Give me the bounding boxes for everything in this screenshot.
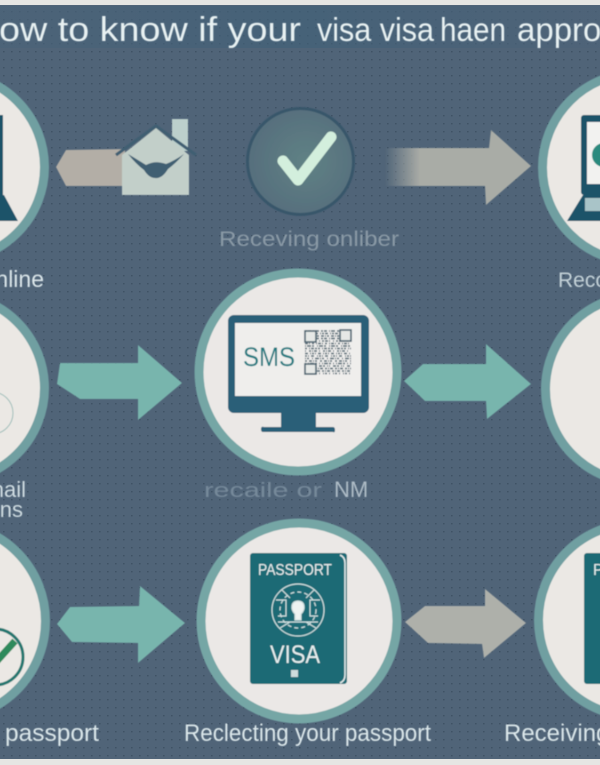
title: visa visa xyxy=(317,11,435,48)
arrow: teal arrow, middle left xyxy=(57,345,182,420)
arrow: grey arrow, bottom right xyxy=(405,589,526,658)
panel: middle right xyxy=(546,296,600,482)
title xyxy=(0,11,600,49)
icon: house envelope xyxy=(116,119,196,195)
label: receiving online: Receving onliber xyxy=(219,227,399,251)
panel: email, middle left xyxy=(0,294,44,482)
panel: passport, bottom right xyxy=(538,524,600,716)
arrow: beige arrow behind the house xyxy=(56,149,125,186)
icon: laptop, top right xyxy=(567,115,600,221)
label: passport, bottom left: passport xyxy=(5,720,99,747)
QR code xyxy=(305,330,351,374)
panel: online laptop, top left xyxy=(0,74,44,260)
icon: passport xyxy=(250,553,347,684)
icon: check stamp xyxy=(0,629,23,685)
passport emblem xyxy=(272,584,324,636)
label: collecting your passport: Reclecting your passport xyxy=(184,720,431,747)
label: email or SMS, centre xyxy=(204,477,368,502)
arrow: teal arrow, middle right xyxy=(404,344,531,419)
panel: passport, bottom left xyxy=(0,524,46,718)
icon: faint email circle xyxy=(0,392,13,434)
icon: approval check badge xyxy=(248,108,354,214)
label: email or SMS, centre: NM xyxy=(334,477,368,502)
icon: passport, bottom right xyxy=(584,553,600,684)
label: email notifications, middle left xyxy=(0,477,26,522)
panel: online laptop, top right xyxy=(542,73,600,262)
arrow: teal arrow, bottom left xyxy=(57,586,185,663)
SMS text: SMS xyxy=(243,342,295,372)
visa text: VISA xyxy=(270,641,320,669)
title: ow to know if your xyxy=(0,11,301,49)
icon: monitor xyxy=(228,315,369,432)
panel: SMS monitor xyxy=(199,273,397,471)
arrow: grey arrow, top right xyxy=(385,130,531,205)
label: email notifications, middle left: ns xyxy=(0,497,23,522)
panel: passport and visa xyxy=(201,523,397,719)
icon: laptop, top left xyxy=(0,115,18,221)
small square mark xyxy=(291,670,298,677)
label: email or SMS, centre: recaile or xyxy=(204,480,322,502)
passport heading: PASSPORT xyxy=(258,562,332,579)
title: haen xyxy=(440,11,506,48)
